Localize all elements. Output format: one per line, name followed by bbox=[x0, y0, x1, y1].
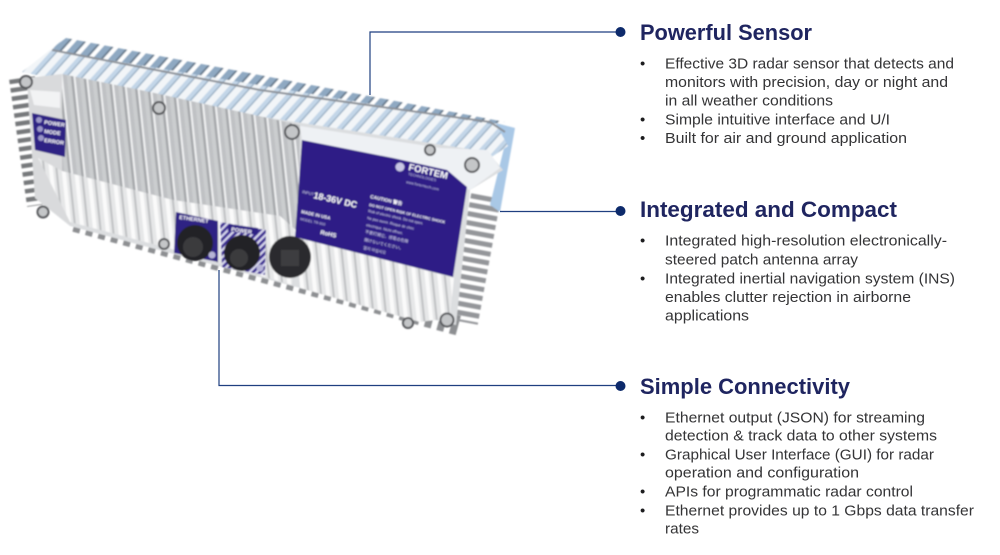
connector cap bbox=[269, 236, 311, 278]
connector line: simple connectivity bbox=[219, 270, 620, 386]
connector dot 2 bbox=[616, 206, 626, 216]
bullet list: • bbox=[640, 270, 645, 288]
bullet list: • bbox=[640, 502, 645, 520]
bullet list: operation and configuration bbox=[665, 466, 859, 482]
section: powerful sensor bbox=[640, 20, 954, 147]
bullet list: • bbox=[640, 56, 645, 72]
section: integrated and compact bbox=[640, 197, 955, 324]
lower light fins bbox=[38, 158, 298, 285]
bullet list: detection & track data to other systems bbox=[665, 428, 937, 444]
ethernet panel bbox=[174, 212, 218, 262]
fins below label bbox=[296, 236, 454, 322]
main purple label: CAUTION 警告 bbox=[370, 193, 403, 207]
bullet list: applications bbox=[665, 308, 749, 324]
bullet list: Ethernet provides up to 1 Gbps data transfer bbox=[665, 504, 974, 520]
power panel: POWER bbox=[231, 227, 252, 236]
bullet list bbox=[640, 232, 955, 324]
bullet list: • bbox=[640, 130, 645, 147]
corner plate highlights bbox=[30, 90, 60, 108]
main purple label: MADE IN USA bbox=[301, 209, 332, 221]
main purple label: INPUT bbox=[302, 189, 315, 197]
bullet list bbox=[640, 410, 974, 538]
main purple label: 開けないでください。 bbox=[364, 236, 404, 251]
left status label: ERROR bbox=[44, 138, 64, 147]
heading: Integrated and Compact bbox=[640, 197, 898, 222]
heading: Simple Connectivity bbox=[640, 374, 851, 399]
left status label: MODE bbox=[44, 129, 61, 137]
connector dot 1 bbox=[616, 27, 626, 37]
under-rail fins bbox=[22, 42, 508, 158]
main purple label: Ne pas ouvrir. Risque de choc bbox=[367, 216, 415, 231]
bullet list: monitors with precision, day or night and bbox=[665, 75, 948, 91]
section: simple connectivity bbox=[640, 374, 974, 538]
connector dot 3 bbox=[616, 381, 626, 391]
main purple label: 18-36V DC bbox=[313, 190, 359, 210]
screws bbox=[20, 76, 479, 328]
main purple label: TECHNOLOGIES bbox=[408, 172, 437, 183]
bullet list: • bbox=[640, 232, 645, 250]
main purple label: 열지 마십시오 bbox=[363, 244, 387, 255]
connector line: integrated and compact bbox=[500, 210, 620, 212]
radar device photo bbox=[20, 38, 515, 328]
main purple label bbox=[295, 140, 467, 277]
top rail bbox=[52, 50, 505, 132]
ethernet panel: ETHERNET bbox=[179, 215, 210, 225]
power panel bbox=[220, 222, 266, 275]
bullet list bbox=[640, 56, 954, 147]
main purple label: RoHS bbox=[320, 230, 337, 240]
connector line: powerful sensor bbox=[370, 32, 620, 95]
bullet list: Graphical User Interface (GUI) for radar bbox=[665, 448, 934, 464]
top-right plate bbox=[300, 126, 500, 190]
main purple label: electrique. Nicht offnen. bbox=[366, 223, 403, 235]
bullet list: • bbox=[640, 112, 645, 128]
bullet list: Integrated inertial navigation system (INS) bbox=[665, 272, 955, 288]
bottom edge fins bbox=[75, 222, 460, 326]
left edge fins bbox=[22, 78, 40, 205]
bullet list: Ethernet output (JSON) for streaming bbox=[665, 410, 925, 426]
bullet list: enables clutter rejection in airborne bbox=[665, 290, 911, 306]
bullet list: Effective 3D radar sensor that detects and bbox=[665, 56, 954, 72]
right edge fins bbox=[463, 196, 486, 322]
left status label: POWER bbox=[44, 120, 65, 129]
right edge blue rim bbox=[490, 122, 515, 212]
main purple label: FORTEM bbox=[407, 162, 449, 182]
bullet list: • bbox=[640, 446, 645, 464]
bullet list: rates bbox=[665, 522, 699, 538]
main purple label: www.fortemtech.com bbox=[406, 180, 439, 191]
main purple label: MODEL TR-900 bbox=[300, 217, 326, 227]
bullet list: Built for air and ground application bbox=[665, 131, 907, 147]
bullet list: APIs for programmatic radar control bbox=[665, 484, 913, 500]
main purple label: Risk of electric shock. Do not open. bbox=[368, 209, 424, 226]
heading: Powerful Sensor bbox=[640, 20, 812, 45]
bullet list: Integrated high-resolution electronically- bbox=[665, 234, 947, 250]
corner plate bbox=[27, 74, 72, 226]
device body bbox=[27, 80, 503, 325]
bullet list: • bbox=[640, 484, 645, 500]
bullet list: steered patch antenna array bbox=[665, 252, 859, 268]
bullet list: • bbox=[640, 410, 645, 426]
bullet list: in all weather conditions bbox=[665, 94, 833, 110]
left status label bbox=[32, 113, 66, 157]
main purple label: DO NOT OPEN RISK OF ELECTRIC SHOCK bbox=[369, 203, 446, 225]
upper dark fins bbox=[62, 74, 300, 232]
rail-top fin tips bbox=[50, 38, 505, 124]
bullet list: Simple intuitive interface and U/I bbox=[665, 112, 890, 128]
main purple label: 不要打開它。感電の危険 bbox=[365, 228, 409, 244]
